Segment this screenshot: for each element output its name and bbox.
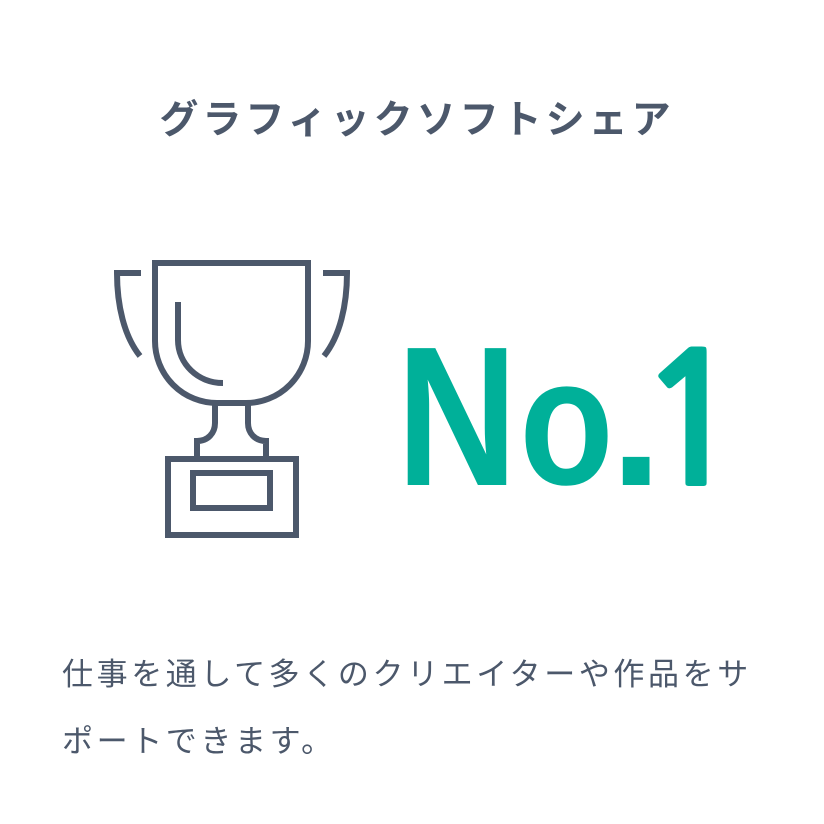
stem (197, 403, 266, 459)
cup (155, 263, 308, 403)
body text: 仕事を通して多くのクリエイターや作品をサ (62, 657, 752, 692)
number: No.1: N (396, 304, 518, 527)
body text: ポートできます。 (62, 724, 336, 759)
number: No.1: 1 (634, 332, 749, 512)
number: No.1: . (610, 315, 663, 526)
number: No.1: o (520, 320, 614, 523)
body text (62, 657, 752, 759)
title: グラフィックソフトシェア (159, 99, 675, 142)
base (168, 459, 296, 535)
right handle (323, 273, 347, 356)
cup highlight (178, 302, 223, 383)
left handle (117, 273, 141, 356)
plate (193, 473, 270, 508)
